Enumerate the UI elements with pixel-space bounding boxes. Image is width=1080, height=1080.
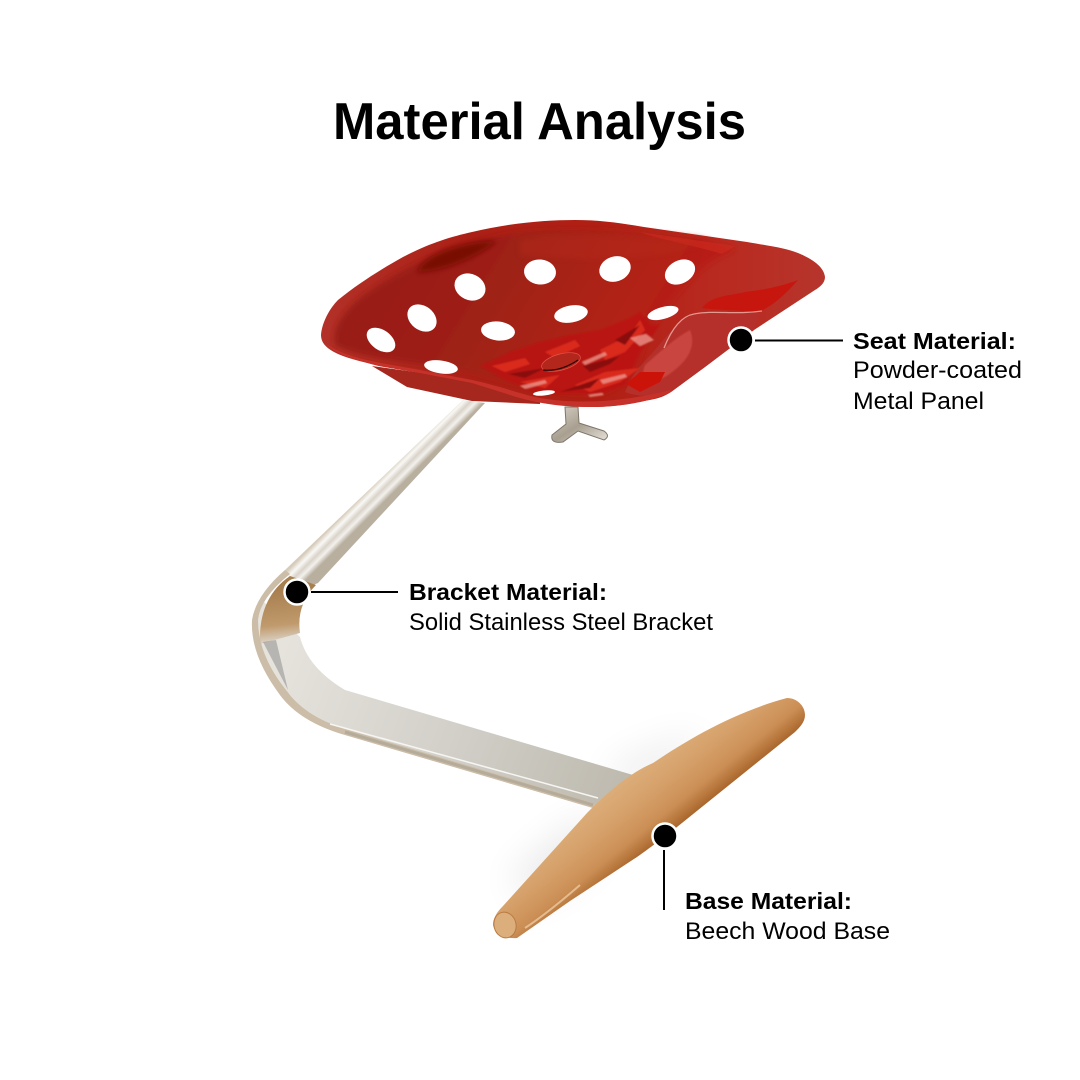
callout: base material: [652, 824, 890, 945]
title: Material Analysis: [333, 93, 746, 151]
seat right bright reflection: [702, 280, 798, 312]
callout: bracket material: [284, 579, 713, 636]
seat inner bowl: [334, 230, 735, 395]
seat front fold: [625, 312, 760, 396]
base description: Beech Wood Base: [685, 918, 890, 945]
bracket label: Bracket Material:: [409, 579, 607, 605]
seat description: Powder-coated: [853, 357, 1022, 384]
base marker and leader: [652, 824, 678, 910]
seat underside flange: [372, 366, 540, 404]
steel bracket arm: [252, 400, 633, 808]
seat lower lip: [325, 343, 671, 407]
seat holes: [362, 252, 700, 397]
stool illustration: [252, 220, 825, 940]
base label: Base Material:: [685, 888, 852, 914]
red seat: [321, 220, 825, 407]
bracket description: Solid Stainless Steel Bracket: [409, 609, 713, 636]
wing nut: [552, 407, 608, 442]
callout: seat material: [728, 328, 1022, 415]
seat label: Seat Material:: [853, 328, 1016, 354]
bracket marker and leader: [284, 580, 398, 604]
seat marker and leader: [728, 328, 843, 352]
seat description: [853, 357, 1022, 415]
floor shadow: [510, 735, 700, 900]
seat right rim highlight: [640, 232, 735, 254]
beech wood base: [491, 698, 805, 940]
seat dark shadow: [417, 241, 497, 272]
seat description: Metal Panel: [853, 388, 984, 415]
seat central reflections: [480, 312, 660, 397]
